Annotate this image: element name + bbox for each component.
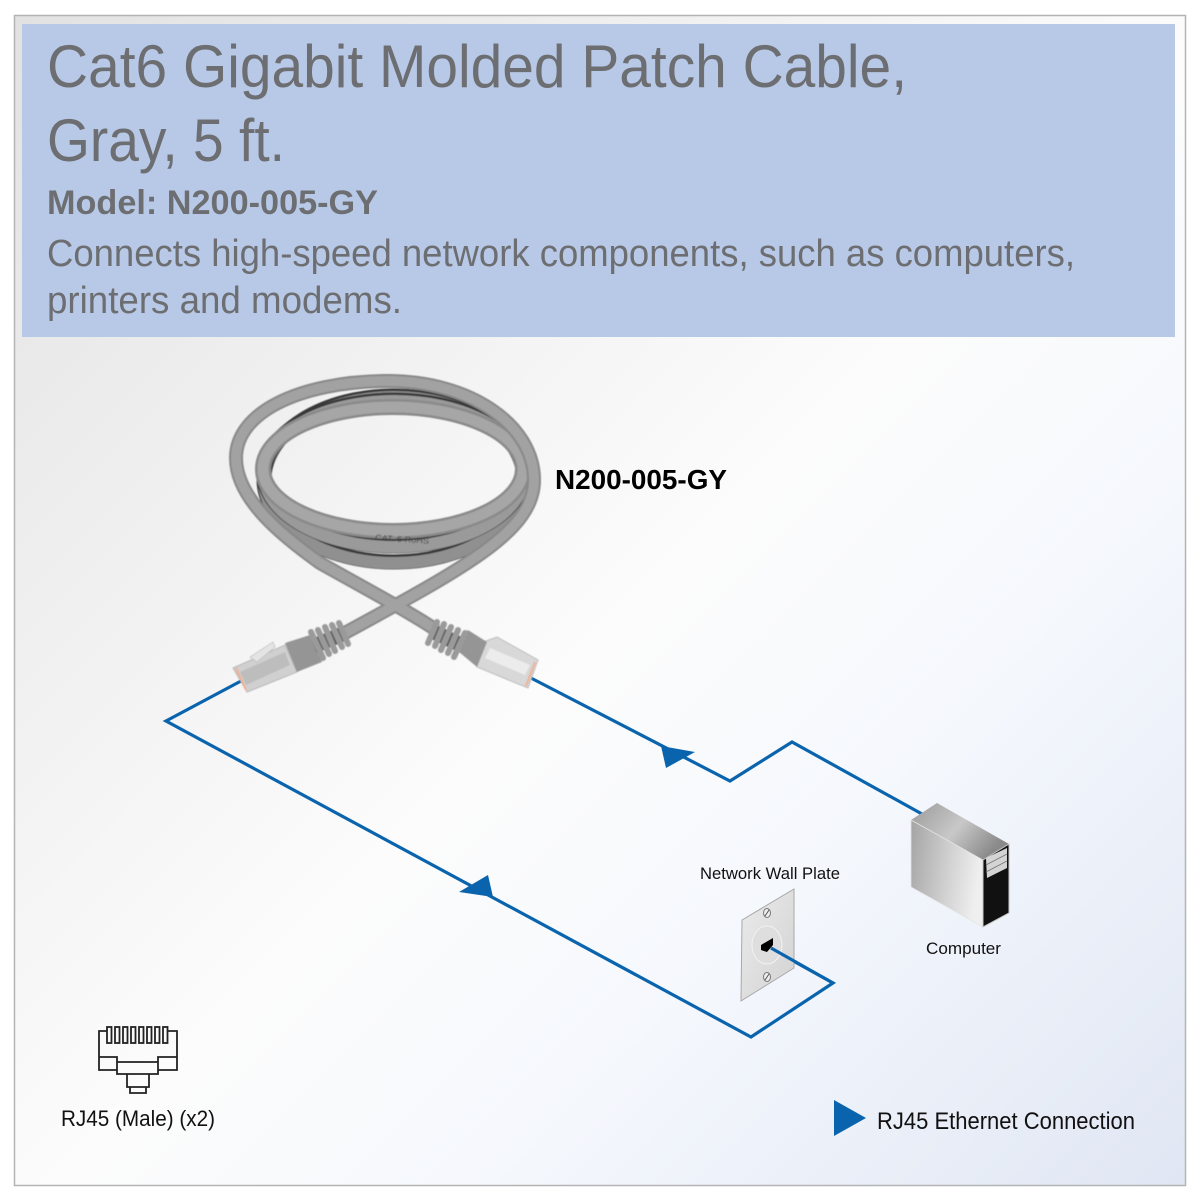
description: Connects high-speed network components, such as computers, [47,233,1075,275]
blue line into wall port [771,948,833,983]
title: Gray, 5 ft. [47,107,285,174]
arrow: toward wall plate [459,875,493,897]
computer label: Computer [926,939,1001,958]
icon: RJ45 male [99,1027,177,1093]
right RJ45 connector [428,622,538,688]
arrow: toward cable [661,746,695,768]
title: Cat6 Gigabit Molded Patch Cable, [47,33,907,100]
left boot ribs [311,623,348,658]
title [47,33,907,174]
right plug [477,637,538,688]
cable label: N200-005-GY [555,464,727,495]
header panel [22,24,1175,337]
description: printers and modems. [47,280,402,322]
left plug [233,645,297,692]
wall plate label: Network Wall Plate [700,864,840,883]
cable print: CAT. 6 RoHS [375,533,429,546]
icon: network wall plate [741,889,794,1001]
outer loop strand [236,381,534,634]
left RJ45 connector [233,623,348,692]
icon: computer tower [911,803,1009,927]
RJ45 label: RJ45 (Male) (x2) [61,1106,215,1131]
patch cable photo illustration [233,381,538,692]
right body [453,630,487,667]
left body [285,635,322,672]
cable coils [236,381,534,634]
legend text: RJ45 Ethernet Connection [877,1108,1135,1135]
right boot ribs [428,622,465,657]
legend [834,1100,1135,1136]
description [47,233,1075,322]
legend arrow [834,1100,866,1136]
model number: Model: N200-005-GY [47,184,378,222]
connection lines [166,677,922,1037]
